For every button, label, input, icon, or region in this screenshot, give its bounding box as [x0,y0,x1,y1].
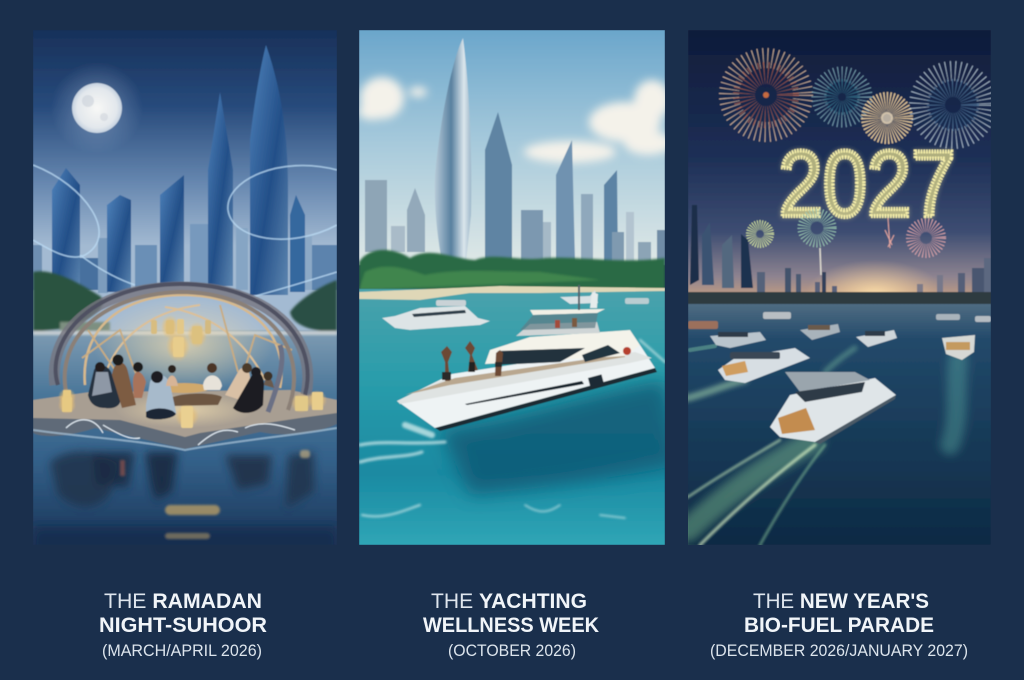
background yachts [382,290,649,330]
distant city skyline [688,205,991,304]
caption line: Bio-Fuel Parade: BIO-FUEL PARADE [744,613,934,637]
clouds [358,77,672,163]
daytime sky [359,30,665,265]
panel: New Year's bio-fuel parade scene [688,30,991,545]
turquoise sea [359,289,665,545]
parade water [688,304,991,545]
warm glow under dome [93,297,273,393]
firework: teal burst [819,74,865,120]
tree line [359,250,665,290]
icon: moon [51,62,143,154]
light trails around towers [33,165,337,300]
sunset glow [805,260,945,330]
city skyline towers [33,45,337,295]
year in sparkling lights: 2027 [778,131,956,236]
night sky [33,30,337,330]
firework: red gold burst [729,58,803,132]
small lower fireworks [751,215,939,275]
night sky with sunset [688,30,991,310]
firework: blue white burst [919,71,987,139]
panel: Ramadan night suhoor scene [33,30,337,544]
hanging and floor lanterns [58,315,327,428]
caption line: the New Year's: THE NEW YEAR'S [753,589,929,613]
floating platform [33,390,337,450]
caption line: Night-Suhoor: NIGHT-SUHOOR [99,613,267,637]
caption line: Wellness Week: WELLNESS WEEK [423,613,599,637]
caption: Ramadan Night-Suhoor [99,589,267,660]
people doing yoga on deck [441,318,631,381]
water [33,330,337,545]
caption line: the Ramadan: THE RAMADAN [104,589,262,613]
caption: Yachting Wellness Week [423,589,599,660]
surf foam [360,340,665,518]
water reflection of pavilion [33,450,337,551]
dark water shadow [440,380,680,495]
skyline towers [365,38,665,266]
firework: gold burst [872,103,902,133]
caption: New Year's Bio-Fuel Parade [710,589,968,660]
panel: Yachting wellness week scene [359,30,665,545]
caption date: (OCTOBER 2026) [448,642,576,660]
glowing green wakes [688,346,958,545]
diners around table [88,354,274,419]
year in sparkling lights: 2027 [778,131,956,236]
parade of boats [688,312,991,444]
domed pavilion [54,284,308,412]
main white yacht [397,285,657,431]
shore trees [33,271,337,335]
caption date: (MARCH/APRIL 2026) [102,642,262,660]
caption line: the Yachting: THE YACHTING [431,589,587,613]
caption date: (DECEMBER 2026/JANUARY 2027) [710,642,968,660]
sandy beach [359,286,665,300]
